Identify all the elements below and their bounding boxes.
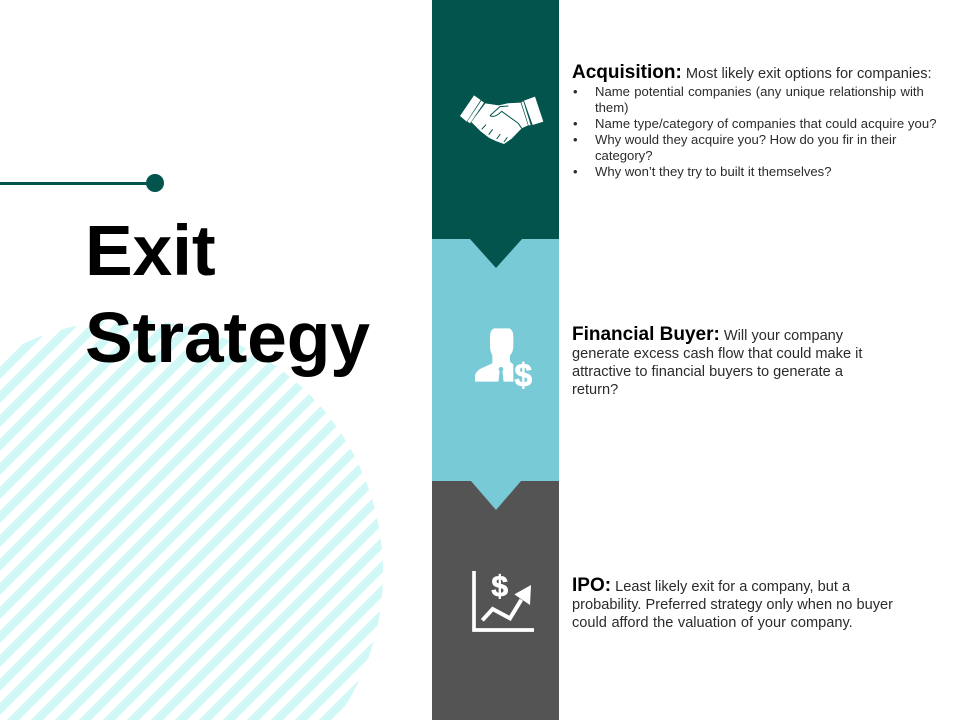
icon: handshake — [460, 95, 544, 144]
title — [85, 211, 370, 378]
bullet list: Name potential companies (any unique relationship with — [595, 84, 924, 99]
icon: businessman with dollar — [475, 328, 532, 393]
bullet list: Name type/category of companies that could acquire you? — [595, 116, 937, 131]
text block: financial buyer: Financial Buyer: Will your company — [572, 324, 843, 345]
text block: IPO — [572, 575, 893, 631]
text block: IPO: IPO: Least likely exit for a company, but a — [572, 575, 850, 596]
text block: IPO: could afford the valuation of your company. — [572, 615, 853, 631]
bullet list: Why won’t they try to built it themselves? — [595, 164, 832, 179]
icon: businessman with dollar: $ — [514, 357, 532, 393]
panel: IPO band — [432, 481, 559, 720]
text block: financial buyer: generate excess cash flow that could make it — [572, 346, 862, 362]
title: Exit — [85, 211, 216, 291]
bullet list: category? — [595, 148, 653, 163]
text block: financial buyer: return? — [572, 382, 618, 398]
bullet list: Why would they acquire you? How do you fir in their — [595, 132, 896, 147]
text block: IPO: probability. Preferred strategy only when no buyer — [572, 597, 893, 613]
striped circle background — [0, 320, 383, 720]
text block: acquisition — [572, 62, 937, 179]
panel: financial buyer band — [432, 239, 559, 510]
icon: growth chart with dollar: $ — [491, 570, 508, 603]
panel: acquisition band — [432, 0, 559, 268]
text block: financial buyer: attractive to financial buyers to generate a — [572, 364, 843, 380]
text block: financial buyer — [572, 324, 862, 398]
heading: acquisition: Acquisition: Most likely exit options for companies: — [572, 62, 932, 83]
title: Strategy — [85, 298, 370, 378]
bullet list: them) — [595, 100, 628, 115]
accent line with dot — [0, 174, 164, 192]
bullet list — [574, 84, 937, 179]
icon: growth chart with dollar — [472, 570, 534, 632]
